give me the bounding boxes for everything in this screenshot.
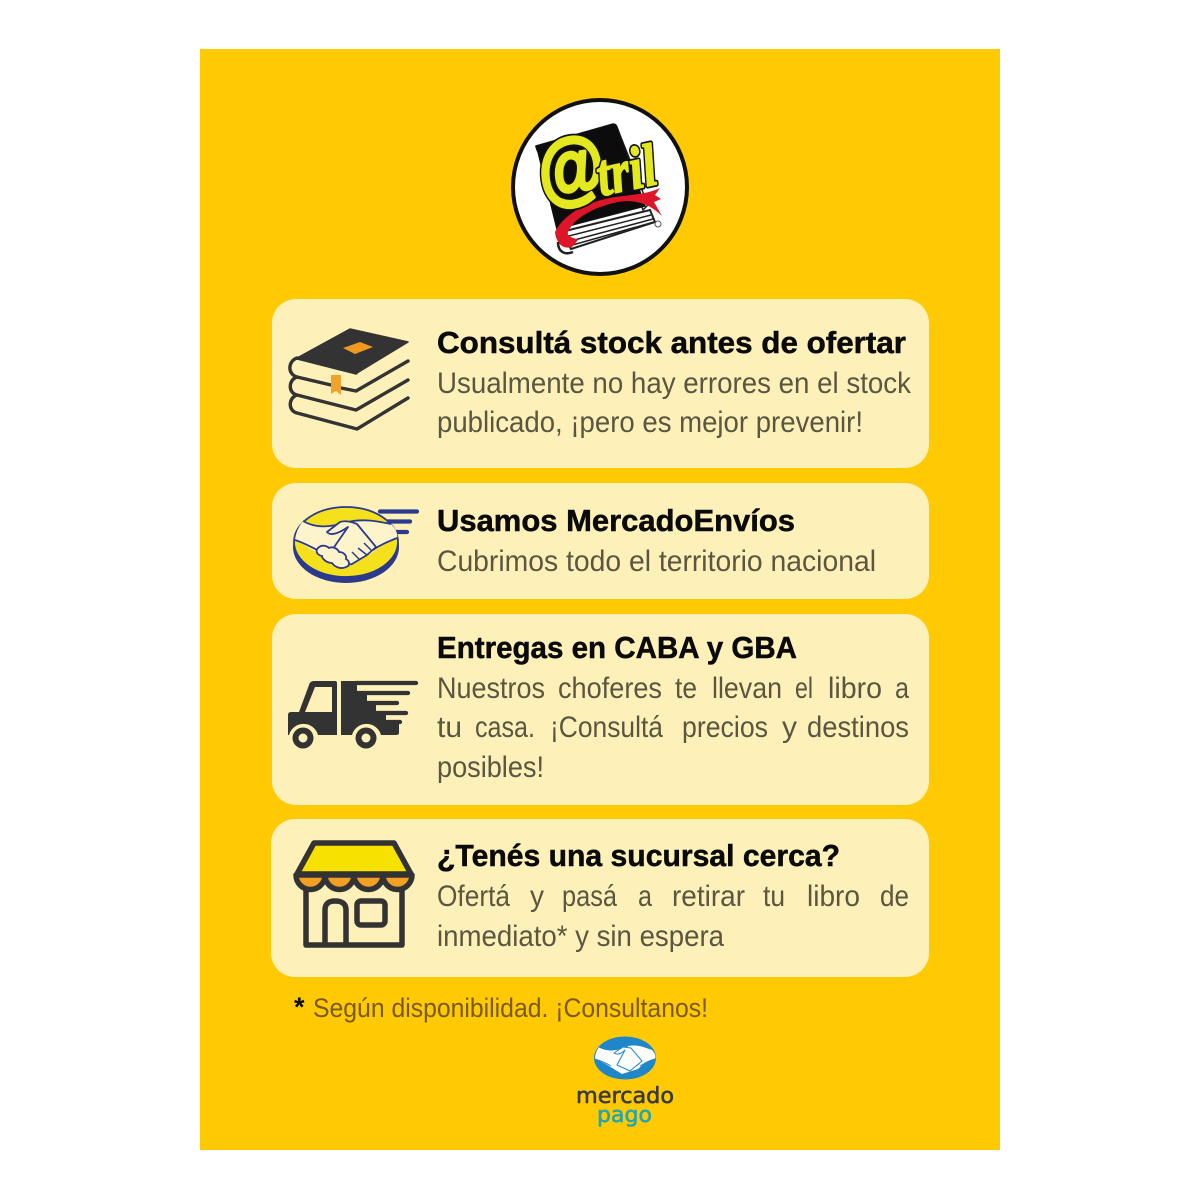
text: Nuestros <box>437 672 545 705</box>
icon: delivery truck <box>288 681 416 748</box>
text: destinos <box>807 711 909 744</box>
text: tu <box>437 711 462 744</box>
logo: Atril: tril <box>590 132 663 209</box>
text: posibles! <box>437 751 544 784</box>
text: publicado, ¡pero es mejor prevenir! <box>437 406 863 439</box>
text: de <box>880 880 909 913</box>
heading: Usamos MercadoEnvíos <box>437 503 795 538</box>
logo: mercado pago <box>576 1036 674 1128</box>
text: libro <box>828 672 882 705</box>
text: Ofertá <box>437 880 510 913</box>
yellow poster background <box>200 49 1000 1150</box>
text: te <box>675 672 697 705</box>
text: retirar <box>672 880 745 913</box>
footnote: * <box>294 992 305 1022</box>
text: y <box>782 711 797 744</box>
text: a <box>895 672 909 705</box>
logo: mercado pago: mercado <box>576 1084 674 1109</box>
text: tu <box>763 880 785 913</box>
text: llevan <box>712 672 782 705</box>
logo: mercado pago: pago <box>597 1103 652 1128</box>
heading: ¿Tenés una sucursal cerca? <box>437 838 840 873</box>
text: Usualmente no hay errores en el stock <box>437 367 912 400</box>
heading: Entregas en CABA y GBA <box>437 630 797 665</box>
text: libro <box>807 880 860 913</box>
logo: Atril <box>513 100 687 274</box>
icon: stack of books <box>290 329 408 429</box>
text: precios <box>682 711 768 744</box>
text: a <box>638 880 652 913</box>
icon: mercado envíos handshake <box>293 507 417 583</box>
text <box>437 880 909 953</box>
text: Cubrimos todo el territorio nacional <box>437 545 876 578</box>
text: ¡Consultá <box>550 711 663 744</box>
panel: consultá stock <box>272 299 929 468</box>
text: choferes <box>558 672 662 705</box>
text: y <box>530 880 544 913</box>
text: casa. <box>475 711 535 744</box>
footnote: Según disponibilidad. ¡Consultanos! <box>313 993 708 1023</box>
panel: sucursal <box>271 819 929 977</box>
text: pasá <box>562 880 617 913</box>
heading: Consultá stock antes de ofertar <box>437 325 906 360</box>
logo: Atril: tril <box>590 132 663 209</box>
icon: storefront <box>296 843 412 945</box>
text: inmediato* y sin espera <box>437 920 724 953</box>
text <box>437 672 909 784</box>
text: el <box>795 672 813 705</box>
logo: Atril: @ <box>531 120 609 217</box>
panel: mercadoenvíos <box>272 483 929 599</box>
logo: Atril: @ <box>531 120 609 217</box>
text <box>437 367 912 439</box>
panel: entregas en CABA y GBA <box>272 614 929 805</box>
